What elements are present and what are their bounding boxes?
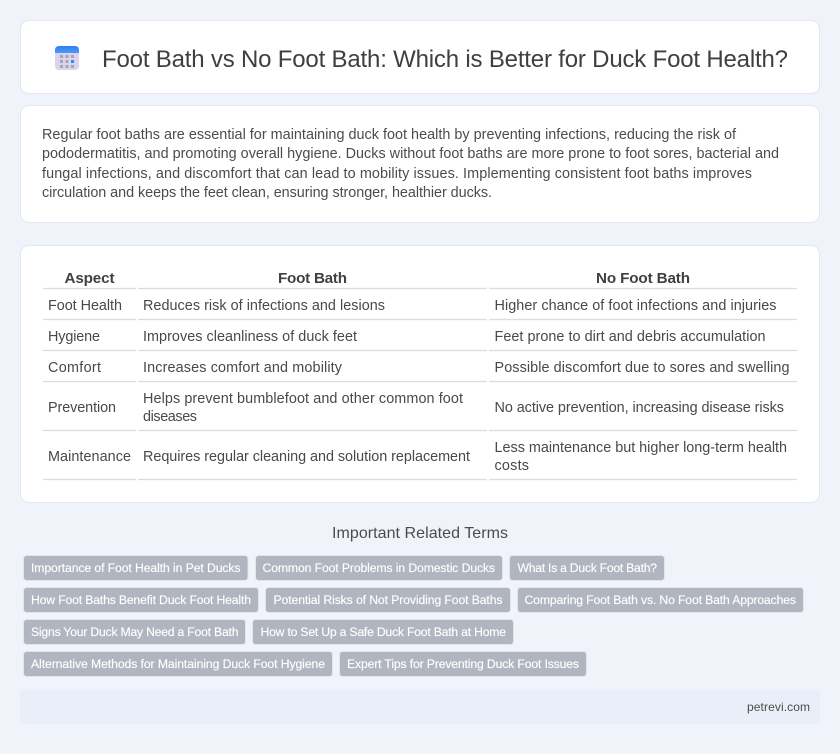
row: prevention: Prevention [48, 400, 116, 416]
tag [340, 652, 586, 676]
tag [24, 556, 248, 580]
row: maintenance: Maintenance [48, 449, 131, 465]
related term tags [24, 556, 804, 676]
tag: Potential Risks of Not Providing Foot Baths [274, 593, 502, 607]
table header [64, 270, 690, 287]
tag: How to Set Up a Safe Duck Foot Bath at Home [260, 625, 506, 639]
tag [510, 556, 664, 580]
table header: Aspect [64, 270, 114, 287]
text block: introduction: pododermatitis, and promoting overall hygiene. Ducks without foot baths are more prone to foot sores, bacterial and [42, 146, 779, 162]
row: prevention [48, 391, 784, 425]
tag: Expert Tips for Preventing Duck Foot Issues [347, 657, 579, 671]
row: comfort [48, 360, 790, 376]
icon: calendar [55, 46, 79, 70]
tag [24, 652, 332, 676]
panel: comparison table [20, 246, 820, 502]
row: foot health [48, 298, 776, 314]
heading: related terms: Important Related Terms [332, 525, 508, 542]
tag: Signs Your Duck May Need a Foot Bath [31, 625, 238, 639]
tag: How Foot Baths Benefit Duck Foot Health [31, 593, 251, 607]
tag [256, 556, 502, 580]
text block: introduction: fungal infections, and discomfort that can lead to mobility issues. Implementing consistent foot baths improves [42, 166, 752, 182]
tag [518, 588, 804, 612]
tag: Comparing Foot Bath vs. No Foot Bath Approaches [524, 593, 796, 607]
row: hygiene [48, 329, 766, 345]
footer [20, 690, 820, 724]
row: foot health: Higher chance of foot infections and injuries [494, 298, 776, 314]
row: hygiene: Improves cleanliness of duck feet [143, 329, 357, 345]
row: prevention: diseases [143, 409, 197, 425]
tag: Alternative Methods for Maintaining Duck Foot Hygiene [31, 657, 325, 671]
row: foot health: Foot Health [48, 298, 122, 314]
footer source: petrevi.com [747, 700, 810, 714]
text block: introduction [42, 127, 779, 201]
row: maintenance: Requires regular cleaning and solution replacement [143, 449, 470, 465]
tag [266, 588, 510, 612]
table header: No Foot Bath [596, 270, 690, 287]
table header: Foot Bath [278, 270, 347, 287]
text block: introduction: circulation and keeps the feet clean, ensuring stronger, healthier ducks. [42, 185, 492, 201]
tag: What Is a Duck Foot Bath? [518, 561, 657, 575]
tag: Common Foot Problems in Domestic Ducks [262, 561, 495, 575]
panel: introduction [20, 106, 820, 222]
text block: introduction: Regular foot baths are essential for maintaining duck foot health by preventing infections, reducing the risk of [42, 127, 737, 143]
row: hygiene: Hygiene [48, 329, 100, 345]
tag [24, 588, 258, 612]
row: prevention: No active prevention, increasing disease risks [494, 400, 784, 416]
title: Foot Bath vs No Foot Bath: Which is Better for Duck Foot Health? [102, 46, 788, 73]
row: hygiene: Feet prone to dirt and debris accumulation [494, 329, 766, 345]
tag [24, 620, 246, 644]
row: foot health: Reduces risk of infections and lesions [143, 298, 385, 314]
row: maintenance: costs [494, 458, 529, 474]
row: maintenance: Less maintenance but higher long-term health [494, 440, 787, 456]
row: comfort: Comfort [48, 360, 101, 376]
tag: Importance of Foot Health in Pet Ducks [31, 561, 240, 575]
row: comfort: Possible discomfort due to sores and swelling [494, 360, 790, 376]
row: comfort: Increases comfort and mobility [143, 360, 343, 376]
tag [252, 620, 514, 644]
row: maintenance [48, 440, 787, 474]
row: prevention: Helps prevent bumblefoot and other common foot [143, 391, 463, 407]
panel: header [20, 20, 820, 94]
